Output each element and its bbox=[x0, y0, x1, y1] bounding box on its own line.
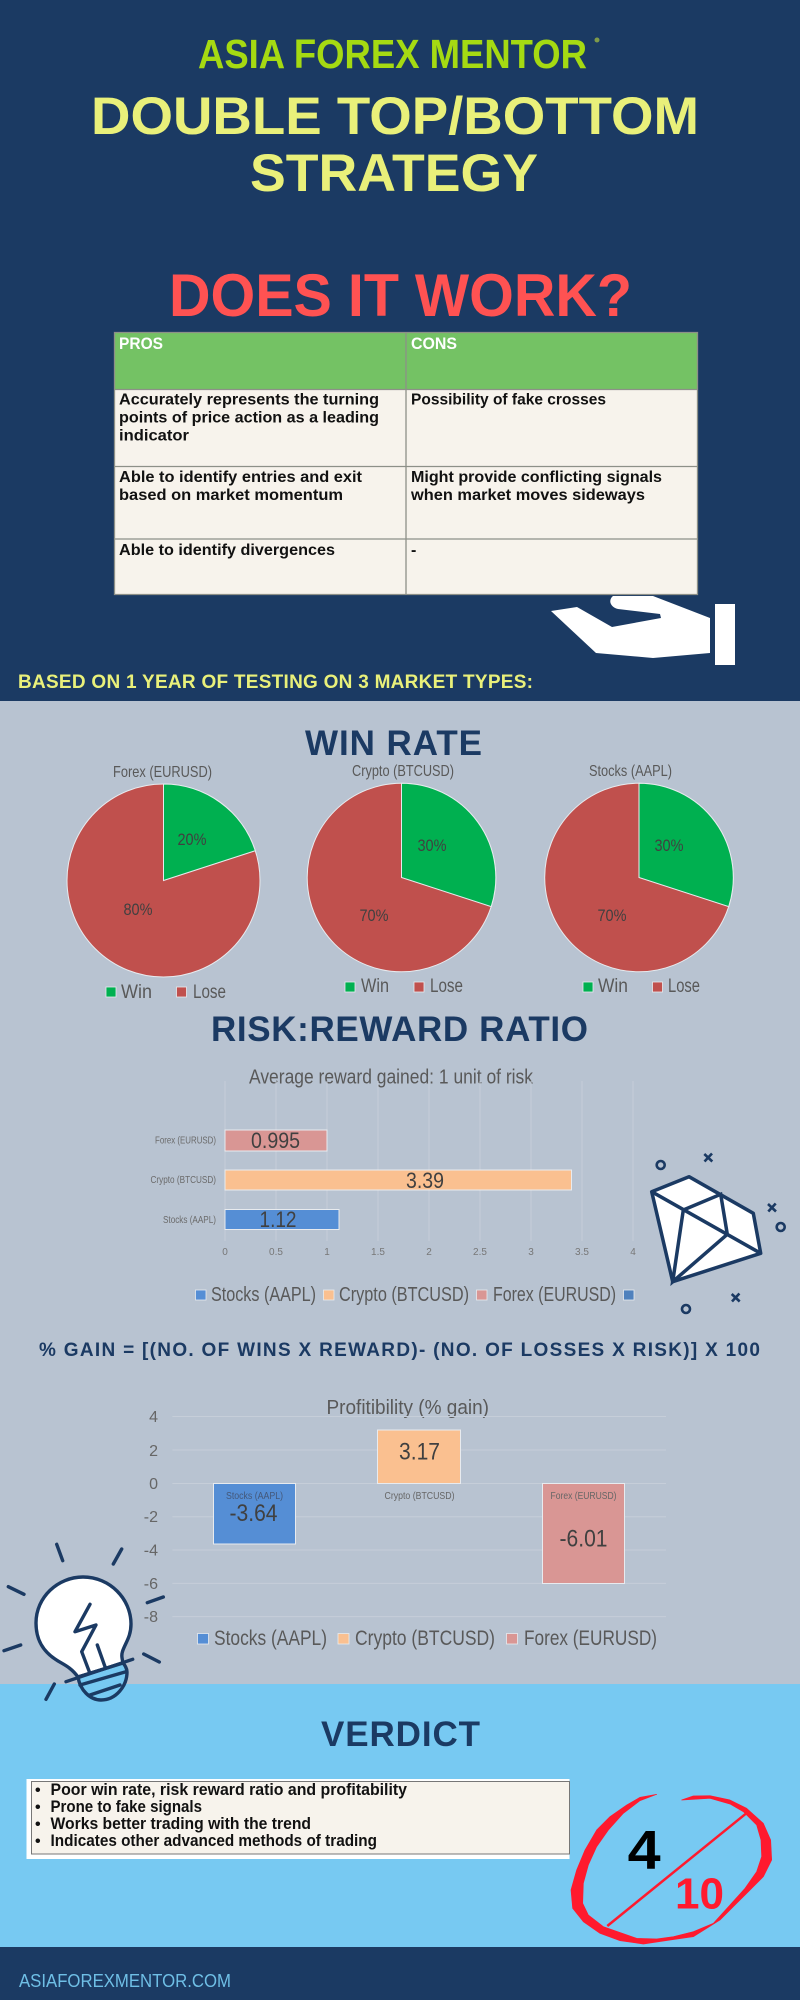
title: DOUBLE TOP/BOTTOM bbox=[91, 87, 699, 146]
value axis labels: 2 bbox=[149, 1443, 158, 1460]
value axis labels: 1.5 bbox=[371, 1247, 385, 1258]
column headings: CONS bbox=[411, 334, 457, 353]
pros text: indicator bbox=[119, 428, 189, 444]
bar: crypto: Crypto (BTCUSD) bbox=[384, 1491, 454, 1502]
score: 4 out of 10 bbox=[571, 1794, 772, 1944]
bar chart: profitability bbox=[144, 1397, 666, 1650]
legend bbox=[198, 1627, 657, 1650]
table: pros and cons bbox=[114, 332, 698, 594]
legend: Forex (EURUSD) bbox=[493, 1284, 616, 1306]
value axis labels: 2 bbox=[426, 1247, 432, 1258]
bar: stocks: Stocks (AAPL) bbox=[226, 1491, 283, 1502]
bar: crypto bbox=[378, 1430, 460, 1502]
bar: forex: Forex (EURUSD) bbox=[550, 1491, 616, 1502]
footer url: ASIAFOREXMENTOR.COM bbox=[19, 1971, 231, 1991]
pros text: Accurately represents the turning bbox=[119, 392, 379, 408]
text box: verdict points: Works better trading with the trend bbox=[50, 1814, 311, 1833]
bar: stocks bbox=[225, 1207, 339, 1232]
text box: verdict points: Prone to fake signals bbox=[50, 1797, 202, 1816]
cons text: when market moves sideways bbox=[410, 487, 645, 504]
text box: verdict points: • bbox=[35, 1833, 41, 1850]
pie chart: crypto: Crypto (BTCUSD) bbox=[352, 763, 454, 780]
value axis labels: 0 bbox=[222, 1247, 228, 1258]
title bbox=[91, 87, 699, 203]
value axis labels: 3.5 bbox=[575, 1247, 589, 1258]
text box: verdict points: Poor win rate, risk reward ratio and profitability bbox=[50, 1780, 408, 1799]
pie chart: stocks: Stocks (AAPL) bbox=[589, 763, 672, 780]
bar: forex bbox=[542, 1484, 624, 1584]
value axis labels: 4 bbox=[630, 1247, 636, 1258]
bar: stocks bbox=[214, 1484, 296, 1544]
logo: ASIA FOREX MENTOR bbox=[198, 31, 587, 77]
pie chart: crypto: Lose bbox=[430, 976, 463, 997]
panel: footer background bbox=[0, 1947, 800, 2000]
legend bbox=[196, 1284, 634, 1306]
pros text: Able to identify entries and exit bbox=[119, 469, 363, 486]
icon: light bulb bbox=[4, 1544, 163, 1700]
legend: Crypto (BTCUSD) bbox=[355, 1627, 495, 1650]
formula: percent gain: % GAIN = [(NO. OF WINS X REWARD)- (NO. OF LOSSES X RISK)] X 100 bbox=[39, 1340, 760, 1361]
category labels: Crypto (BTCUSD) bbox=[150, 1175, 216, 1186]
category labels: Forex (EURUSD) bbox=[155, 1136, 216, 1146]
category labels bbox=[150, 1136, 216, 1226]
pie chart: crypto: 70% bbox=[360, 906, 388, 925]
value axis labels: 4 bbox=[149, 1409, 158, 1426]
bar: forex: 0.995 bbox=[251, 1128, 300, 1153]
value axis labels: 0 bbox=[149, 1476, 158, 1493]
bar: stocks: -3.64 bbox=[230, 1500, 278, 1527]
panel: charts background bbox=[0, 701, 800, 1684]
text box: verdict points: Indicates other advanced methods of trading bbox=[50, 1831, 377, 1850]
icon: hand bbox=[551, 596, 735, 665]
value axis labels: -2 bbox=[144, 1509, 158, 1526]
subheading: based on testing: BASED ON 1 YEAR OF TESTING ON 3 MARKET TYPES: bbox=[18, 672, 533, 693]
legend: Stocks (AAPL) bbox=[214, 1627, 327, 1650]
bar: crypto: 3.17 bbox=[399, 1438, 440, 1466]
heading: risk reward ratio: RISK:REWARD RATIO bbox=[211, 1010, 588, 1049]
heading: win rate: WIN RATE bbox=[305, 724, 482, 763]
panel: header background bbox=[0, 0, 800, 701]
text box: verdict points: • bbox=[35, 1799, 41, 1816]
heading: verdict: VERDICT bbox=[321, 1715, 480, 1754]
value axis labels: -6 bbox=[144, 1576, 158, 1593]
bar chart: average reward: Average reward gained: 1 unit of risk bbox=[249, 1066, 534, 1088]
pie chart: forex: Forex (EURUSD) bbox=[113, 764, 212, 781]
score: 4 out of 10: 4 bbox=[628, 1818, 661, 1880]
title: STRATEGY bbox=[250, 144, 538, 203]
table header row bbox=[114, 332, 698, 390]
category labels: Stocks (AAPL) bbox=[163, 1215, 216, 1226]
pie chart: stocks: Win bbox=[598, 976, 628, 997]
pros text: Able to identify divergences bbox=[119, 542, 335, 559]
pie chart: stocks: 30% bbox=[654, 836, 684, 855]
panel: verdict background bbox=[0, 1684, 800, 1947]
legend: Forex (EURUSD) bbox=[524, 1627, 657, 1650]
score: 4 out of 10: 10 bbox=[675, 1869, 724, 1918]
legend: Crypto (BTCUSD) bbox=[339, 1284, 469, 1306]
icon: diamond bbox=[652, 1154, 785, 1313]
pie chart: forex bbox=[67, 764, 260, 1003]
pie chart: stocks: 70% bbox=[598, 906, 626, 925]
pie chart: crypto: 30% bbox=[418, 836, 446, 855]
pie chart: stocks bbox=[545, 763, 733, 997]
bar: forex: -6.01 bbox=[560, 1526, 608, 1552]
text box: verdict points: • bbox=[35, 1816, 41, 1833]
text box: verdict points bbox=[26, 1779, 570, 1859]
legend: Stocks (AAPL) bbox=[211, 1284, 316, 1306]
table body bbox=[114, 390, 698, 594]
value axis labels: 0.5 bbox=[269, 1247, 283, 1258]
cons text: Possibility of fake crosses bbox=[411, 392, 606, 408]
value axis labels bbox=[144, 1409, 158, 1626]
cons text: - bbox=[411, 542, 416, 559]
value axis labels: 3 bbox=[528, 1247, 534, 1258]
bar chart: average reward bbox=[150, 1066, 636, 1306]
pie chart: crypto: Win bbox=[361, 976, 389, 997]
bar: stocks: 1.12 bbox=[260, 1207, 296, 1232]
bar: crypto: 3.39 bbox=[406, 1168, 444, 1193]
column headings: PROS bbox=[119, 334, 163, 353]
value axis labels bbox=[222, 1247, 636, 1258]
cons text: Might provide conflicting signals bbox=[411, 469, 662, 486]
bar chart: profitability: Profitibility (% gain) bbox=[326, 1397, 489, 1419]
text box: verdict points: • bbox=[35, 1782, 41, 1799]
pros text: based on market momentum bbox=[119, 487, 343, 504]
pie chart: crypto bbox=[307, 763, 496, 997]
pros text: points of price action as a leading bbox=[119, 410, 379, 426]
pie chart: stocks: Lose bbox=[668, 976, 700, 997]
heading: does it work: DOES IT WORK? bbox=[169, 262, 632, 329]
pie chart: forex: Lose bbox=[193, 982, 226, 1003]
column headings bbox=[119, 334, 457, 353]
pie chart: forex: 80% bbox=[124, 900, 152, 919]
value axis labels: -4 bbox=[144, 1542, 158, 1560]
bar: forex bbox=[225, 1128, 327, 1153]
value axis labels: 1 bbox=[324, 1247, 330, 1258]
value axis labels: -8 bbox=[144, 1609, 158, 1626]
value axis labels: 2.5 bbox=[473, 1247, 487, 1258]
pros text bbox=[119, 392, 379, 559]
pie chart: forex: Win bbox=[121, 982, 152, 1003]
pie chart: forex: 20% bbox=[178, 830, 206, 849]
cons text bbox=[410, 392, 662, 559]
bar: crypto bbox=[225, 1168, 572, 1193]
